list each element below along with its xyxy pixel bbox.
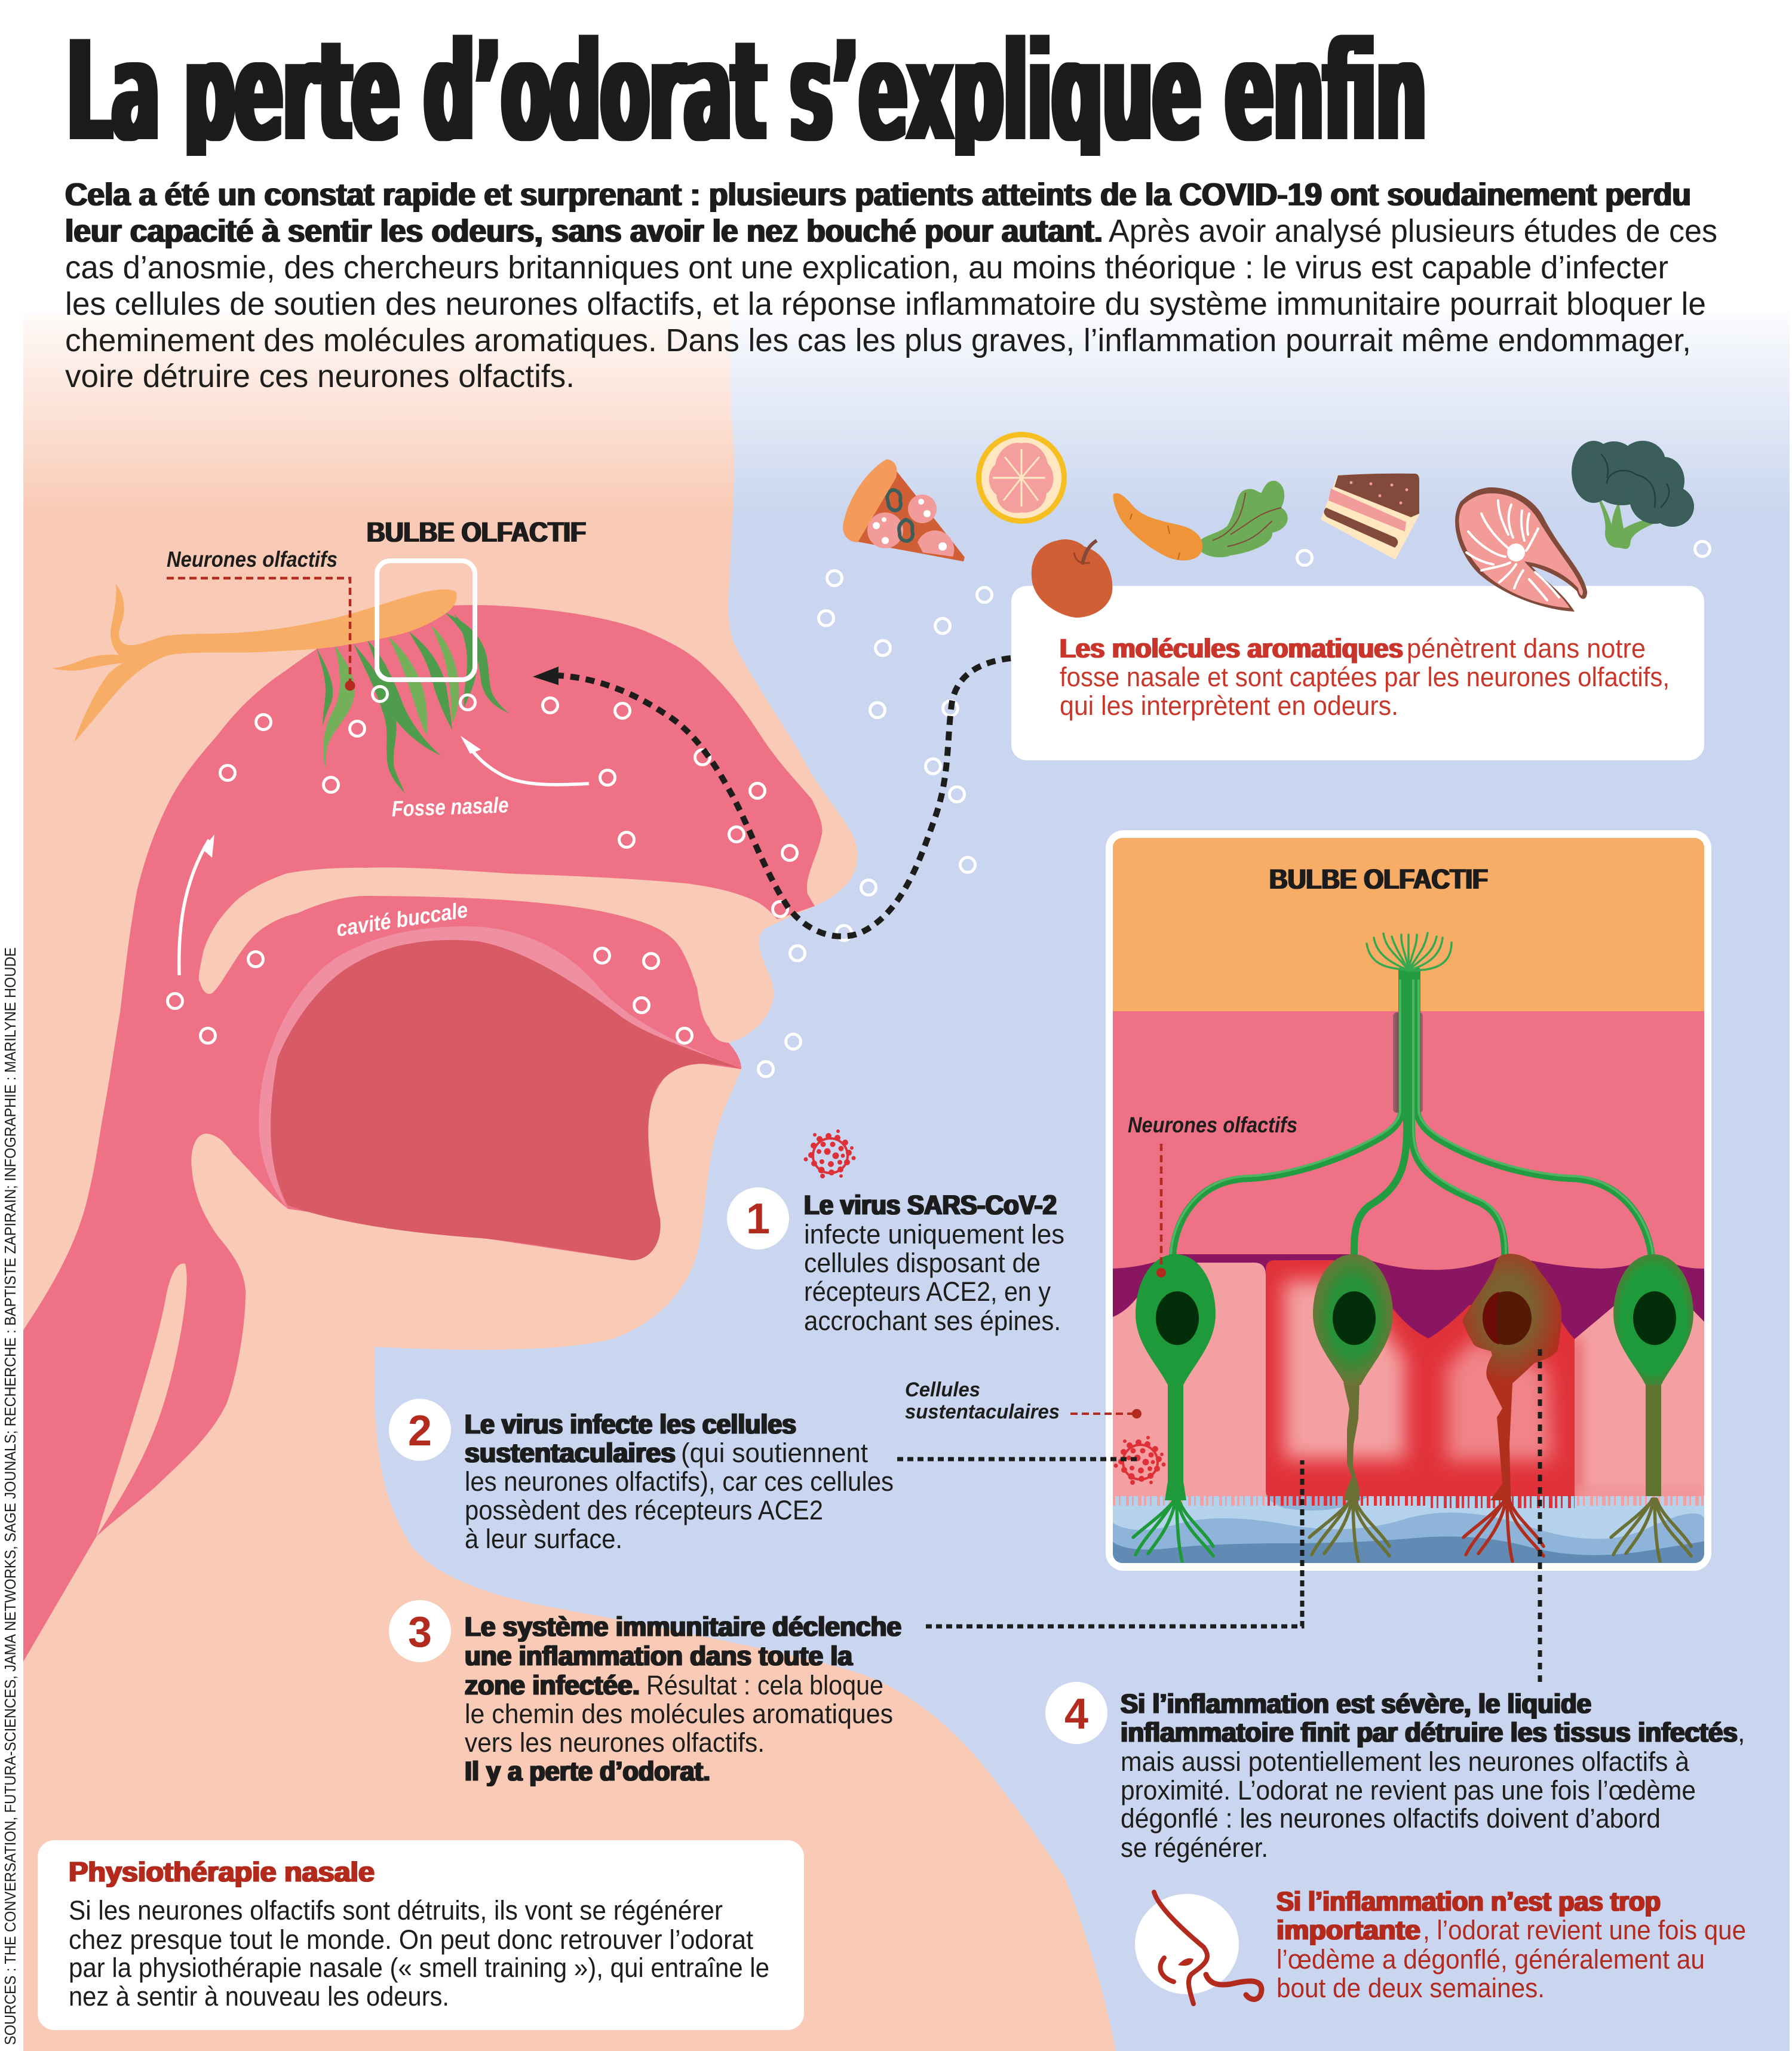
fade to white behind intro	[23, 299, 1790, 514]
intro text: Après avoir analysé plusieurs études de ces	[1109, 213, 1717, 249]
step 3: Résultat : cela bloque	[646, 1670, 883, 1700]
fosse nasale label: Fosse nasale	[391, 793, 509, 821]
tongue	[271, 940, 742, 1260]
olfactory neuron cilia	[317, 613, 509, 793]
cilia fringe	[1113, 1493, 1704, 1506]
tongue outer band	[259, 926, 742, 1209]
intro text: leur capacité à sentir les odeurs, sans avoir le nez bouché pour autant.	[65, 213, 1103, 249]
step 2: sustentaculaires	[465, 1438, 676, 1468]
axon bundle	[1173, 971, 1652, 1257]
panel: physiothérapie nasale: Physiothérapie nasale	[69, 1856, 375, 1887]
throat slit	[96, 1264, 187, 1537]
connector: step 4 to destroyed neuron	[1538, 1349, 1542, 1682]
step 4	[1045, 1682, 1745, 1863]
step 2: (qui soutiennent	[681, 1438, 868, 1468]
step 4: 4	[1064, 1690, 1088, 1738]
step 2: à leur surface.	[465, 1524, 622, 1554]
step 3: zone infectée.	[465, 1670, 640, 1700]
step 4: se régénérer.	[1121, 1832, 1268, 1863]
intro text: cheminement des molécules aromatiques. Dans les cas les plus graves, l’inflammation pourrait même endommager,	[65, 323, 1691, 358]
panel heading: BULBE OLFACTIF	[1269, 863, 1488, 895]
step 1: accrochant ses épines.	[804, 1306, 1061, 1336]
arrowheads	[202, 736, 481, 858]
icon: apple	[1032, 539, 1112, 618]
connector: step 3 to inflammation	[926, 1460, 1302, 1626]
panel: aromatic molecules	[1011, 586, 1704, 760]
step 4: mais aussi potentiellement les neurones olfactifs à	[1121, 1746, 1690, 1777]
step 3: une inflammation dans toute la	[465, 1641, 853, 1671]
cellules sustentaculaires label with leader: sustentaculaires	[905, 1401, 1060, 1423]
neurons label with leader: Neurones olfactifs	[167, 547, 337, 572]
icon: virus	[804, 1129, 855, 1178]
red note: mild inflammation: bout de deux semaines.	[1277, 1973, 1545, 2003]
neuron 4 slightly affected	[1611, 1254, 1693, 1561]
step 3: 3	[408, 1608, 432, 1656]
step 2: possèdent des récepteurs ACE2	[465, 1495, 823, 1525]
step 1: infecte uniquement les	[804, 1219, 1064, 1249]
step 3: vers les neurones olfactifs.	[465, 1727, 765, 1758]
icon: virus in cell	[1113, 1436, 1166, 1485]
cellules sustentaculaires label with leader	[905, 1378, 1142, 1423]
panel: physiothérapie nasale: Si les neurones olfactifs sont détruits, ils vont se régénérer	[69, 1895, 723, 1926]
sustentacular cell 2 inflamed	[1266, 1254, 1433, 1505]
step 3: Le système immunitaire déclenche	[465, 1611, 901, 1642]
red note: mild inflammation: Si l’inflammation n’est pas trop	[1277, 1886, 1661, 1917]
nasal and oral cavity	[23, 605, 823, 1662]
panel: physiothérapie nasale: chez presque tout le monde. On peut donc retrouver l’odorat	[69, 1924, 753, 1955]
dotted arrow: molecule path	[533, 658, 1011, 937]
head silhouette in profile	[23, 287, 1116, 2051]
step 2: 2	[408, 1407, 432, 1455]
neurones label with leader in panel: Neurones olfactifs	[1128, 1113, 1297, 1137]
icon: nose	[1135, 1892, 1262, 2004]
panel: aromatic molecules: Les molécules aromatiques	[1060, 633, 1403, 664]
step 4: Si l’inflammation est sévère, le liquide	[1121, 1688, 1591, 1719]
icon: cake slice	[1321, 474, 1419, 560]
panel: physiothérapie nasale	[38, 1840, 804, 2030]
icon: carrot and leaves	[1113, 481, 1288, 560]
step 3: le chemin des molécules aromatiques	[465, 1699, 893, 1729]
sustentacular cell 1	[1113, 1263, 1266, 1496]
step 2: les neurones olfactifs), car ces cellules	[465, 1466, 894, 1497]
neurones label with leader in panel	[1128, 1113, 1297, 1278]
icon: salmon steak	[1455, 487, 1587, 612]
mucus layer	[1113, 1254, 1704, 1339]
step 3	[389, 1600, 901, 1786]
icon: pizza slice	[843, 459, 965, 561]
panel: olfactory bulb detail	[1106, 830, 1711, 1571]
central axon sheath	[1393, 1012, 1423, 1113]
step 2	[389, 1399, 894, 1554]
step 1: récepteurs ACE2, en y	[804, 1276, 1051, 1307]
connector: step 2 to cell	[897, 1457, 1138, 1461]
step 4: inflammatoire finit par détruire les tissus infectés	[1121, 1717, 1738, 1748]
intro text: cas d’anosmie, des chercheurs britanniques ont une explication, au moins théorique : le virus est capable d’infecter	[65, 250, 1668, 285]
neurons label with leader	[167, 547, 355, 690]
neuron 1 healthy	[1133, 1254, 1216, 1561]
step 4: ,	[1738, 1717, 1745, 1748]
red note: mild inflammation: l’œdème a dégonflé, généralement au	[1277, 1944, 1705, 1975]
step 2: Le virus infecte les cellules	[465, 1409, 796, 1439]
step 1: 1	[746, 1195, 770, 1243]
step 1: Le virus SARS-CoV-2	[804, 1190, 1057, 1220]
aromatic molecule bubbles	[167, 541, 1710, 1076]
panel: aromatic molecules: qui les interprètent en odeurs.	[1060, 690, 1398, 721]
intro text: les cellules de soutien des neurones olfactifs, et la réponse inflammatoire du système immunitaire pourrait bloquer le	[65, 286, 1706, 322]
panel: physiothérapie nasale: nez à sentir à nouveau les odeurs.	[69, 1981, 449, 2012]
red note: mild inflammation: , l’odorat revient une fois que	[1423, 1915, 1746, 1945]
red note: mild inflammation	[1277, 1886, 1746, 2003]
neuron 3 destroyed	[1462, 1254, 1561, 1561]
intro text	[65, 177, 1717, 394]
cavité buccale label: cavité buccale	[335, 898, 470, 941]
neuron 2 affected	[1309, 1254, 1393, 1561]
panel: aromatic molecules: fosse nasale et sont captées par les neurones olfactifs,	[1060, 662, 1670, 692]
axon tuft	[1367, 933, 1452, 971]
red note: mild inflammation: importante	[1277, 1915, 1420, 1945]
olfactory bulb and nerve	[51, 584, 457, 742]
step 4: proximité. L’odorat ne revient pas une fois l’œdème	[1121, 1775, 1696, 1806]
intro text: voire détruire ces neurones olfactifs.	[65, 358, 575, 394]
bulb highlight frame	[377, 561, 475, 680]
step 3: Il y a perte d’odorat.	[465, 1756, 710, 1786]
air passage arrows	[179, 744, 589, 975]
step 4: dégonflé : les neurones olfactifs doivent d’abord	[1121, 1803, 1661, 1834]
vertical source credits: SOURCES : THE CONVERSATION, FUTURA-SCIENCES, JAMA NETWORKS, SAGE JOUNALS; RECHERCHE : BAPTISTE ZAPIRAIN; INFOGRAPHIE : MARILYNE HOUDE	[1, 947, 19, 2045]
bulb label: BULBE OLFACTIF	[367, 516, 586, 548]
icon: broccoli	[1572, 441, 1694, 549]
step 1: cellules disposant de	[804, 1248, 1041, 1278]
sustentacular cell 3 inflamed	[1429, 1284, 1578, 1505]
intro text: Cela a été un constat rapide et surprenant : plusieurs patients atteints de la COVID-19 ont soudainement perdu	[65, 177, 1691, 213]
panel: physiothérapie nasale: par la physiothérapie nasale (« smell training »), qui entraîne le	[69, 1952, 769, 1983]
panel: aromatic molecules: pénètrent dans notre	[1407, 633, 1646, 664]
sustentacular cell 4	[1570, 1302, 1705, 1499]
icon: grapefruit	[976, 432, 1067, 524]
step 1	[727, 1187, 1064, 1336]
cellules sustentaculaires label with leader: Cellules	[905, 1378, 980, 1401]
blue lower layers	[1113, 1493, 1704, 1563]
